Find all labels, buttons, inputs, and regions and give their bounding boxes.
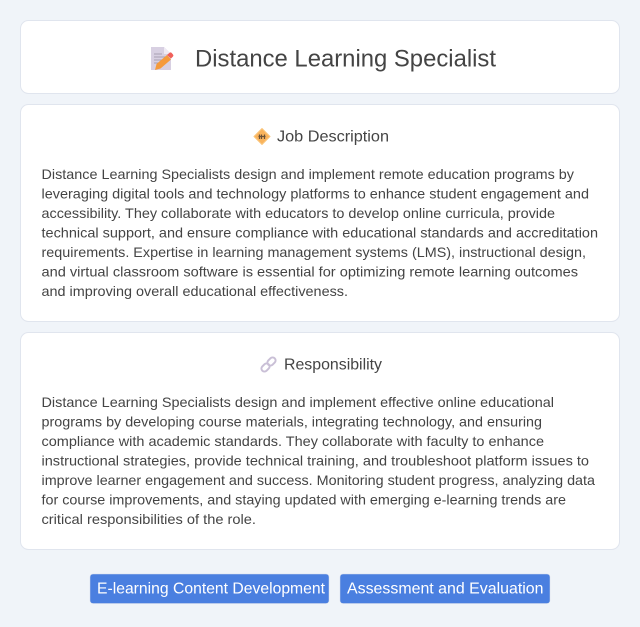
text block: responsibility: instructional strategies, provide technical training, and troubleshoot platform issues to <box>42 452 589 468</box>
panel: responsibility <box>20 332 620 550</box>
text block: job description: leveraging digital tools and technology platforms to enhance student engagement and <box>42 186 589 202</box>
panel: title card <box>20 20 620 94</box>
text block: responsibility: programs by developing course materials, integrating technology, and ensuring <box>42 414 542 430</box>
tag: e-learning content development <box>90 574 329 604</box>
icon: chain link <box>260 356 277 373</box>
tag: assessment and evaluation: Assessment and Evaluation <box>347 580 544 598</box>
heading: job description: Job Description <box>277 128 389 146</box>
text block: job description: Distance Learning Specialists design and implement remote education programs by <box>42 166 574 182</box>
text block: responsibility: improve learner engagement and success. Monitoring student progress, analyzing data <box>42 472 595 488</box>
text block: responsibility: compliance with academic standards. They collaborate with faculty to enhance <box>42 433 544 449</box>
text block: responsibility <box>42 394 595 527</box>
text block: job description: technical support, and ensure compliance with educational standards and accreditation <box>42 224 598 240</box>
tag: e-learning content development: E-learning Content Development <box>97 580 326 598</box>
text block: job description: accessibility. They collaborate with educators to develop online curricula, provide <box>42 205 555 221</box>
text block: job description: requirements. Expertise in learning management systems (LMS), instructional design, <box>42 244 586 260</box>
panel: job description <box>20 104 620 322</box>
text block: job description <box>42 166 598 299</box>
tag: assessment and evaluation <box>340 574 550 604</box>
text block: responsibility: Distance Learning Specialists design and implement effective online educational <box>42 394 554 410</box>
title: Distance Learning Specialist <box>195 46 496 72</box>
icon: document with pencil <box>151 47 173 70</box>
text block: responsibility: critical responsibilities of the role. <box>42 511 256 527</box>
icon: diamond road sign <box>254 128 270 144</box>
heading: responsibility: Responsibility <box>284 356 382 374</box>
text block: job description: and virtual classroom software is essential for optimizing remote learning outcomes <box>42 264 578 280</box>
text block: responsibility: for course improvements, and staying updated with emerging e-learning trends are <box>42 492 566 508</box>
text block: job description: and improving overall educational effectiveness. <box>42 283 348 299</box>
